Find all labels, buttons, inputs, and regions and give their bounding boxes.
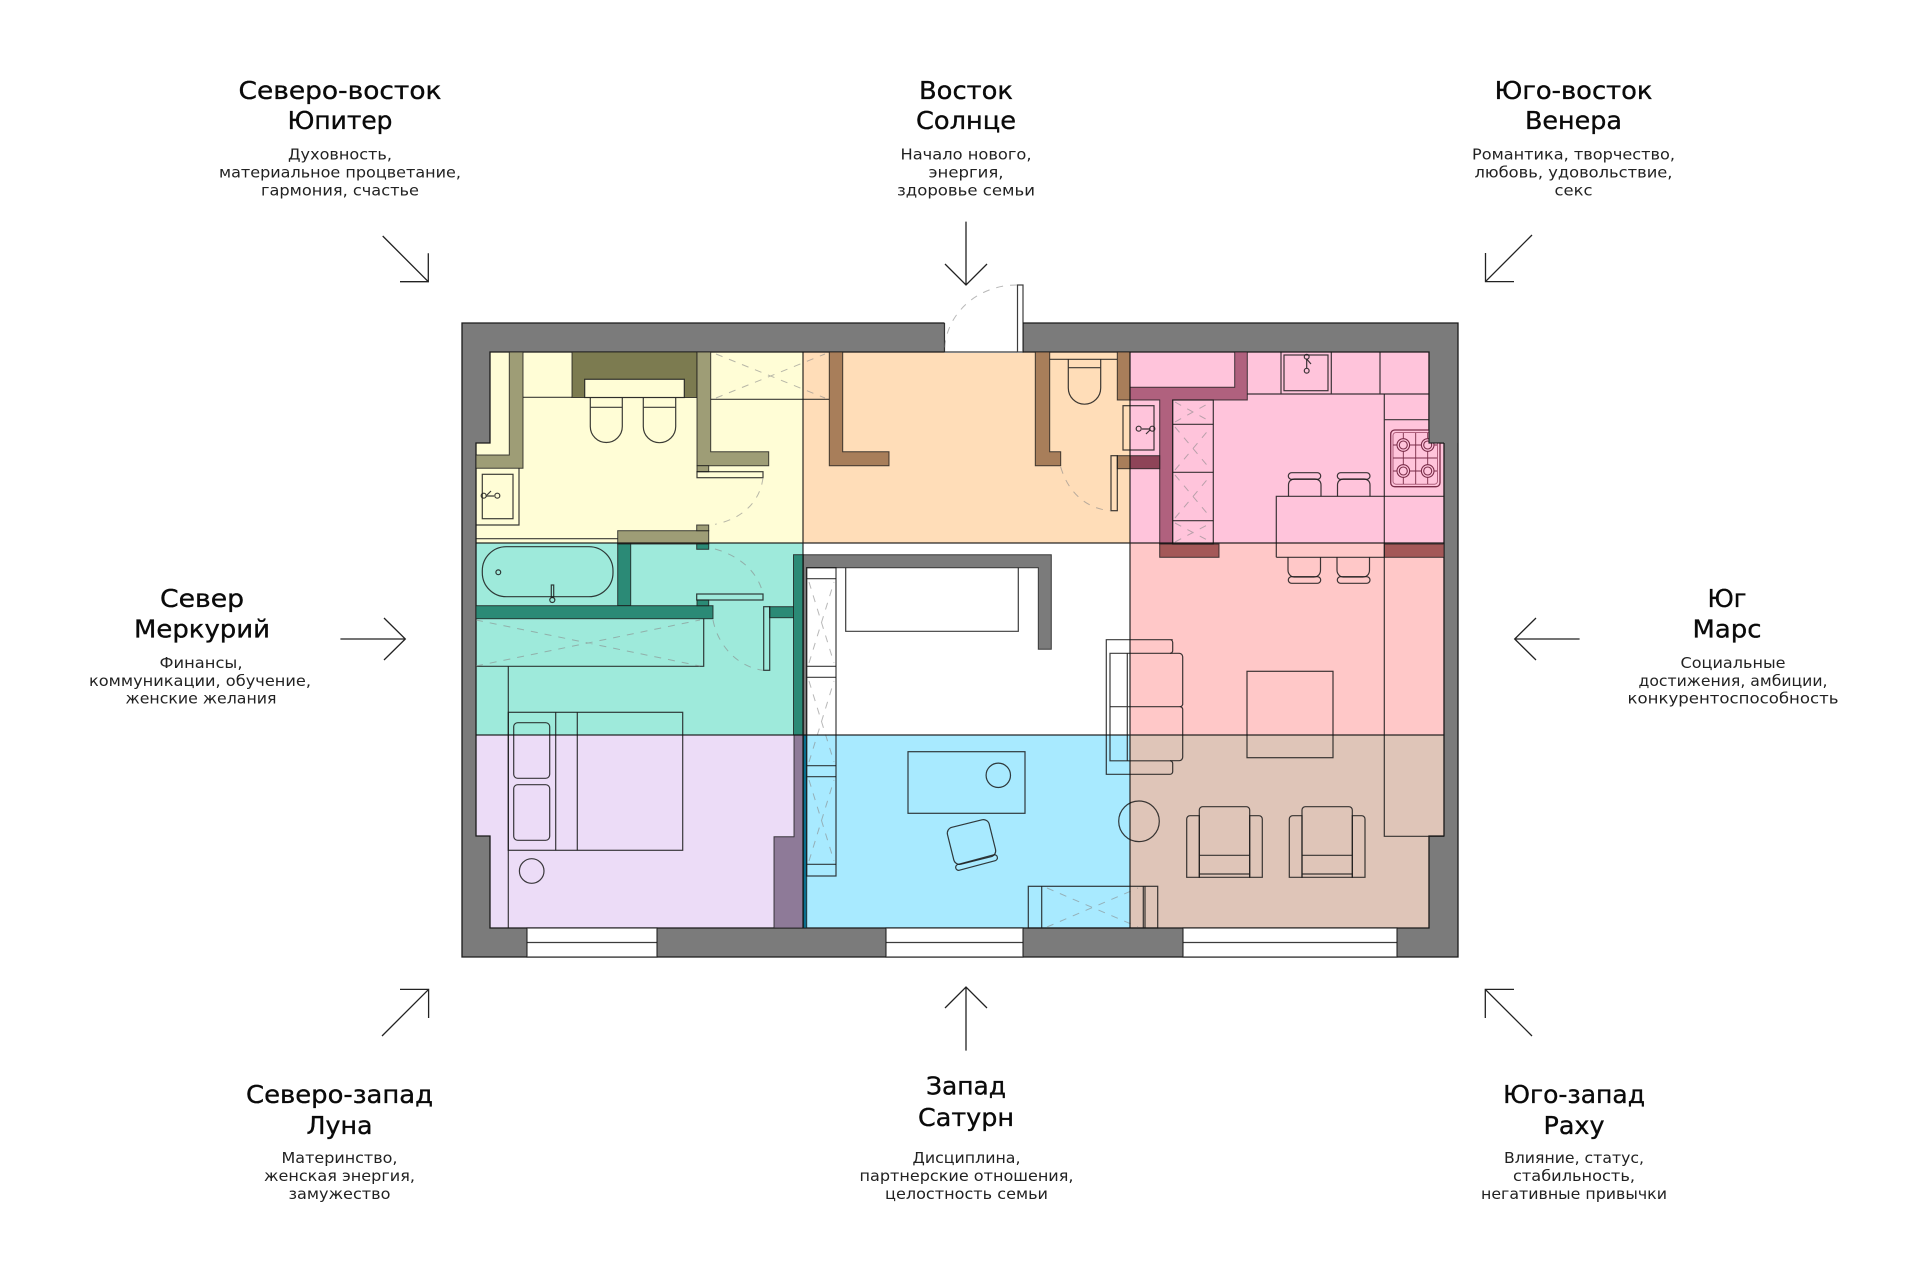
label: north Mercury: женские желания [126, 690, 276, 708]
label: north-west Moon [246, 1080, 433, 1203]
coffee table [1247, 671, 1333, 758]
partition walls: orange zone [829, 352, 1130, 469]
armchair 1 [1187, 807, 1262, 877]
label: south-west Rahu: Юго-запад [1503, 1080, 1645, 1109]
label: south-west Rahu: стабильность, [1513, 1167, 1635, 1185]
label: south-east Venus: секс [1554, 182, 1592, 200]
label: west Saturn: Дисциплина, [912, 1149, 1020, 1167]
label: south-east Venus [1472, 76, 1675, 200]
purple wall: north-west zone [774, 735, 803, 928]
label: north-east Jupiter: Северо-восток [238, 76, 442, 105]
label: north-west Moon: Луна [306, 1111, 372, 1140]
central living room walls [803, 555, 1051, 928]
pantry cabinets: pink zone [1173, 400, 1213, 544]
label: west Saturn: Сатурн [918, 1103, 1014, 1132]
label: north-east Jupiter: гармония, счастье [261, 182, 419, 200]
desk [908, 752, 1025, 813]
label: north Mercury [89, 584, 311, 708]
arrow: east [945, 222, 987, 285]
floor plan [462, 285, 1458, 957]
label: south Mars [1628, 584, 1838, 708]
low cabinet [1028, 886, 1158, 928]
entrance door opening [944, 285, 1023, 353]
label: south-east Venus: Венера [1525, 106, 1622, 135]
label: south-east Venus: Романтика, творчество, [1472, 146, 1675, 164]
label: south Mars: Марс [1692, 614, 1762, 644]
label: south-east Venus: любовь, удовольствие, [1474, 164, 1672, 182]
arrow: north-east [383, 236, 428, 282]
bed [508, 712, 683, 883]
arrow: south [1515, 618, 1580, 660]
label: south-west Rahu: Влияние, статус, [1504, 1149, 1644, 1167]
label: west Saturn: Запад [926, 1072, 1006, 1100]
zone: west blue [803, 735, 1130, 928]
label: south-west Rahu: негативные привычки [1481, 1185, 1667, 1203]
gas stove [1391, 430, 1440, 487]
label: south Mars: Социальные [1680, 654, 1786, 672]
outer wall corner edge [1429, 400, 1444, 443]
bathtub [482, 547, 613, 602]
zone: south red [1130, 543, 1444, 735]
label: north-east Jupiter: Юпитер [288, 106, 392, 135]
label: south Mars: Юг [1708, 584, 1746, 613]
kitchen counter and sink [1247, 352, 1444, 836]
label: north-west Moon: Северо-запад [246, 1080, 433, 1109]
zone: south-west tan [1130, 735, 1444, 928]
label: north-east Jupiter [219, 76, 461, 200]
zone: east orange [803, 352, 1130, 543]
bathroom furniture: yellow zone [476, 379, 763, 539]
armchair 2 [1289, 807, 1365, 877]
zone: north-west lilac [476, 735, 803, 928]
label: west Saturn: партнерские отношения, [860, 1167, 1074, 1185]
zone: north teal [476, 543, 803, 735]
label: south Mars: достижения, амбиции, [1638, 672, 1828, 690]
partition walls: yellow zone [476, 352, 769, 544]
outer walls [462, 323, 1458, 957]
label: west Saturn: целостность семьи [885, 1185, 1048, 1203]
label: north-west Moon: женская энергия, [264, 1167, 415, 1185]
label: north Mercury: Финансы, [160, 654, 242, 672]
label: east Sun: здоровье семьи [897, 182, 1035, 200]
side table [1119, 801, 1159, 842]
label: west Saturn [860, 1072, 1074, 1203]
label: east Sun [897, 76, 1035, 200]
label: south-east Venus: Юго-восток [1494, 76, 1652, 105]
label: east Sun: Солнце [916, 106, 1016, 135]
zone: south-east pink [1130, 352, 1444, 543]
arrow: north-west [382, 989, 429, 1036]
zone divider lines [476, 352, 1444, 928]
label: north Mercury: Меркурий [134, 614, 270, 644]
doors and wardrobe: teal zone [476, 549, 770, 928]
label: north-east Jupiter: Духовность, [288, 146, 392, 164]
partition walls: pink zone [1130, 352, 1444, 557]
partition walls: teal zone [476, 544, 803, 735]
label: east Sun: энергия, [928, 164, 1004, 182]
label: north-west Moon: замужество [288, 1185, 390, 1203]
wardrobe in corridor [711, 354, 829, 399]
tv console [846, 568, 1018, 631]
arrow: south-east [1486, 235, 1532, 282]
label: north-east Jupiter: материальное процветание, [219, 164, 461, 182]
label: north Mercury: коммуникации, обучение, [89, 672, 311, 690]
label: north Mercury: Север [160, 584, 244, 613]
arrow: south-west [1485, 989, 1532, 1036]
arrow: north [340, 618, 405, 660]
sofa [1106, 640, 1183, 774]
label: east Sun: Восток [919, 76, 1013, 105]
windows [527, 928, 1397, 957]
label: east Sun: Начало нового, [900, 146, 1032, 164]
label: south-west Rahu: Раху [1544, 1111, 1605, 1140]
label: south Mars: конкурентоспособность [1628, 690, 1838, 708]
arrow: west [945, 987, 987, 1051]
label: south-west Rahu [1481, 1080, 1667, 1203]
outer wall corner over stove [1429, 400, 1457, 443]
tall wardrobe on west wall [807, 568, 836, 876]
zone: north-east yellow [476, 352, 803, 543]
dining table with chairs [1276, 473, 1444, 583]
office chair [946, 818, 998, 871]
toilet room: orange zone [1050, 359, 1155, 511]
label: north-west Moon: Материнство, [282, 1149, 398, 1167]
